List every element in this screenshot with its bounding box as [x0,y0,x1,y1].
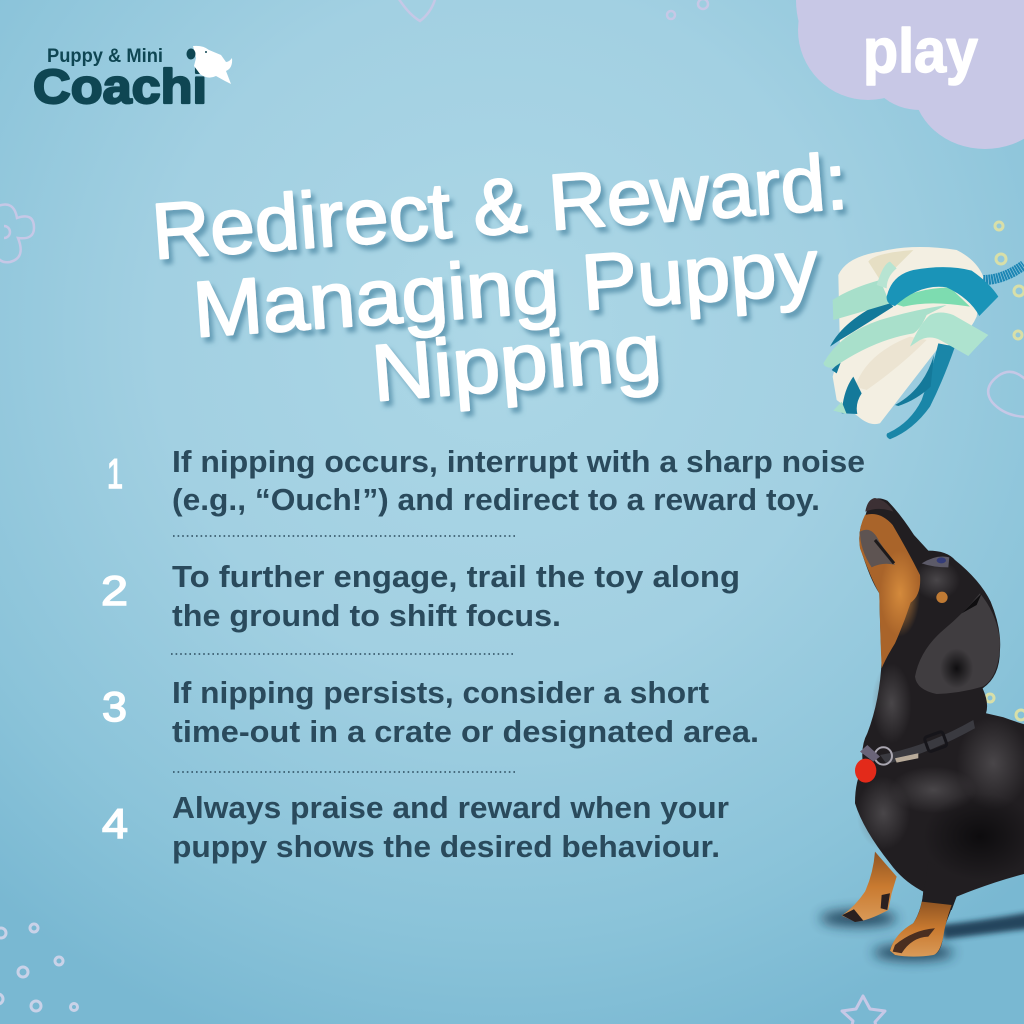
step 3 [102,675,759,749]
number 4: 4 [102,800,128,847]
title [149,136,850,418]
toy [823,247,1024,439]
dog collar ring [875,747,892,765]
logo [33,46,232,114]
dog thigh shadow [923,793,1024,880]
dog mouth [860,530,895,567]
step 4 text: puppy shows the desired behaviour. [172,829,720,864]
step 1 text: (e.g., “Ouch!”) and redirect to a reward toy. [172,482,820,517]
dog front leg [890,862,957,956]
dog coat sheen [857,560,1024,850]
step 2 text: the ground to shift focus. [172,598,561,633]
dog eye [922,556,949,567]
dog ear [915,593,1000,694]
dog shadow [820,910,1024,961]
dog red tag [855,759,876,783]
toy blue band [887,267,998,316]
number 2: 2 [101,567,128,614]
step 2 text: To further engage, trail the toy along [172,559,740,594]
number 1: 1 [107,450,123,497]
dog body [855,498,1024,910]
logo text: Puppy & Mini: Puppy & Mini [47,46,163,67]
step 1 text: If nipping occurs, interrupt with a sharp noise [172,444,865,479]
step 1 [107,444,865,517]
toy cream strips [833,247,983,424]
title line 3: Nipping [368,306,664,418]
toy cord [983,265,1024,280]
dog eyebrow spot [936,592,948,603]
step 2 [101,559,740,633]
step 3 text: time-out in a crate or designated area. [172,714,759,749]
numbered list [101,444,865,864]
dog muzzle and chest tan [859,514,920,668]
title line 2: Managing Puppy [190,221,821,354]
cloud: category badge [796,0,1024,149]
icon: logo dog [186,46,232,84]
number 3: 3 [102,683,127,730]
icon: rings right [986,222,1024,720]
category label: play: play [863,17,978,86]
step 4 [102,790,729,864]
toy mint strips [833,280,890,320]
logo text: Coachi: Coachi [33,61,207,114]
step 3 text: If nipping persists, consider a short [172,675,709,710]
title line 1: Redirect & Reward: [149,136,850,276]
step 4 text: Always praise and reward when your [172,790,729,825]
icon: rings bottom-left [0,924,78,1011]
dog nose [865,498,893,512]
icon: dots top [667,0,708,19]
icon: heart right [988,372,1024,417]
icon: heart top [397,0,436,21]
dog rear paw leg [842,852,897,922]
icon: star bottom [842,996,885,1024]
icon: flower left [0,204,34,262]
dog collar [880,720,975,764]
toy dark teal strips [887,343,955,439]
dog photo illustration [820,498,1024,961]
